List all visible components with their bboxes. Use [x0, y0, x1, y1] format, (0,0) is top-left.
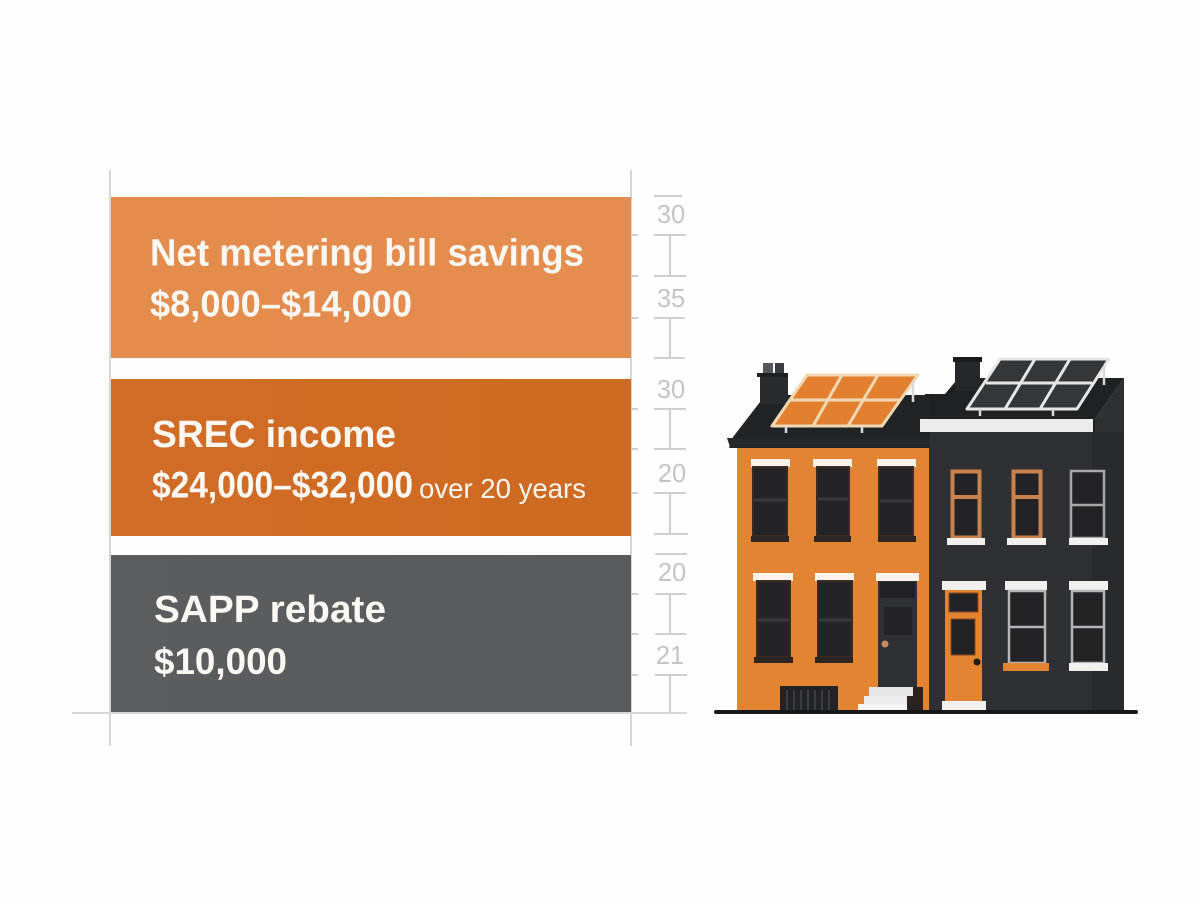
white roof band [920, 419, 1093, 432]
orange door [942, 581, 986, 710]
dimension scale: 30 [657, 376, 685, 404]
bar: net metering bill savings [111, 197, 631, 358]
bar: SAPP rebate: $10,000 [154, 641, 287, 682]
dimension scale: 20 [658, 460, 686, 488]
bar: SAPP rebate [111, 555, 631, 712]
wall [737, 448, 929, 710]
stacked value bars [111, 197, 631, 712]
chimney [953, 357, 982, 391]
lower windows [1003, 581, 1108, 671]
dark roof [925, 378, 1124, 432]
solar panel: orange [772, 375, 918, 433]
bar: SREC income: SREC income [152, 414, 396, 456]
dimension scale [632, 196, 688, 713]
bar: net metering bill savings: $8,000–$14,000 [150, 284, 412, 324]
lower windows [753, 573, 854, 663]
dimension scale: 30 [657, 201, 685, 229]
bar: SREC income [111, 379, 631, 536]
bar: SREC income: over 20 years [419, 473, 586, 504]
chimney [757, 363, 788, 404]
basement vent [780, 686, 838, 711]
bar: SREC income: $24,000–$32,000 [152, 464, 413, 506]
illustration: terraced houses with rooftop solar [714, 357, 1138, 714]
orange house [727, 363, 930, 711]
dark door [876, 573, 919, 691]
upper windows [751, 459, 916, 542]
ground line [714, 710, 1138, 714]
front steps [858, 687, 923, 710]
dimension scale: 20 [658, 559, 686, 587]
roof [729, 395, 930, 448]
dimension scale: 21 [656, 642, 684, 670]
bar: SAPP rebate: SAPP rebate [154, 589, 386, 631]
solar panel: dark [967, 359, 1109, 416]
bar: net metering bill savings: Net metering bill savings [150, 232, 584, 274]
dimension scale: 35 [657, 285, 685, 313]
chart axes [72, 170, 687, 746]
dark house [925, 357, 1124, 710]
upper windows [947, 471, 1108, 545]
